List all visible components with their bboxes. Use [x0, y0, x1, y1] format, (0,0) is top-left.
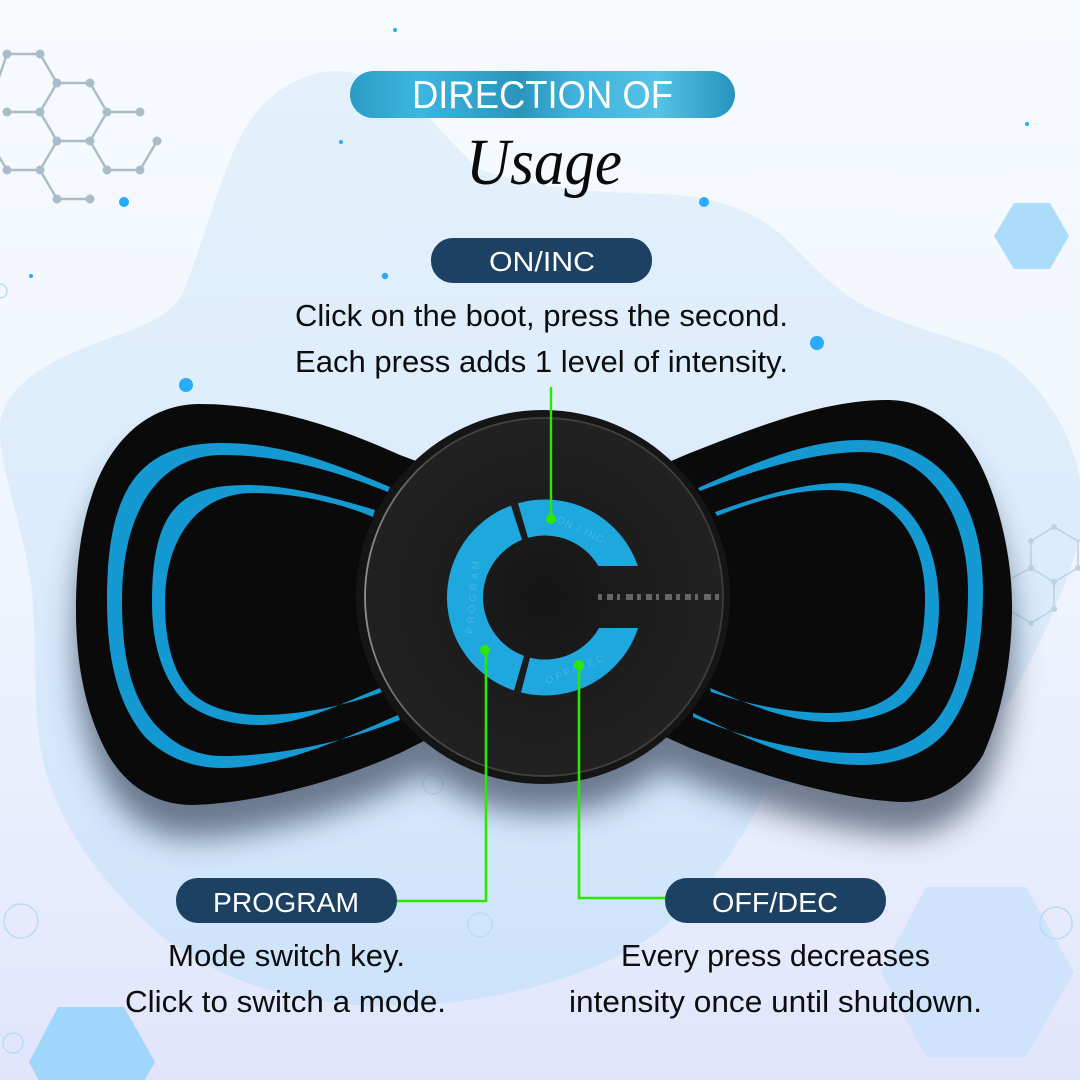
left wing — [76, 404, 440, 805]
description: PROGRAM: Click to switch a mode. — [125, 984, 446, 1019]
description: PROGRAM — [125, 938, 446, 1019]
icon: molecule right — [1012, 524, 1080, 626]
icon: molecule top left — [0, 50, 162, 204]
indicator slit — [598, 594, 722, 600]
title script word: Usage — [466, 126, 622, 199]
massager device — [76, 400, 1012, 805]
description: PROGRAM: Mode switch key. — [168, 938, 405, 973]
button: PROGRAM: PROGRAM — [465, 561, 482, 634]
button: ON/INC: ON / INC — [555, 515, 605, 546]
icon: hexagon top right — [994, 203, 1069, 269]
description: OFF/DEC: intensity once until shutdown. — [569, 984, 982, 1019]
label: ON/INC: ON/INC — [489, 246, 595, 277]
icon: hexagon bottom right — [881, 887, 1074, 1057]
description: ON/INC: Each press adds 1 level of intensity. — [295, 344, 788, 379]
connector: PROGRAM — [397, 645, 490, 901]
connector: ON/INC — [546, 387, 556, 524]
label: ON/INC — [431, 238, 652, 283]
button: OFF/DEC — [521, 628, 638, 695]
icon: hexagon bottom left — [29, 1007, 155, 1080]
label: PROGRAM: PROGRAM — [213, 887, 359, 918]
button: OFF/DEC: OFF/DEC — [544, 653, 606, 687]
description: ON/INC — [295, 298, 788, 379]
title pill — [350, 71, 735, 118]
right wing — [650, 400, 1012, 802]
button: PROGRAM — [447, 506, 524, 690]
label: OFF/DEC: OFF/DEC — [712, 887, 838, 918]
description: OFF/DEC — [569, 938, 982, 1019]
button: ON/INC — [518, 500, 638, 566]
label: OFF/DEC — [665, 878, 886, 923]
title pill: DIRECTION OF — [412, 74, 673, 117]
drop shadow of massager — [76, 433, 1012, 838]
connector: OFF/DEC — [574, 660, 665, 898]
label: PROGRAM — [176, 878, 397, 923]
description: OFF/DEC: Every press decreases — [621, 938, 930, 973]
central control disc — [356, 410, 730, 784]
description: ON/INC: Click on the boot, press the second. — [295, 298, 788, 333]
